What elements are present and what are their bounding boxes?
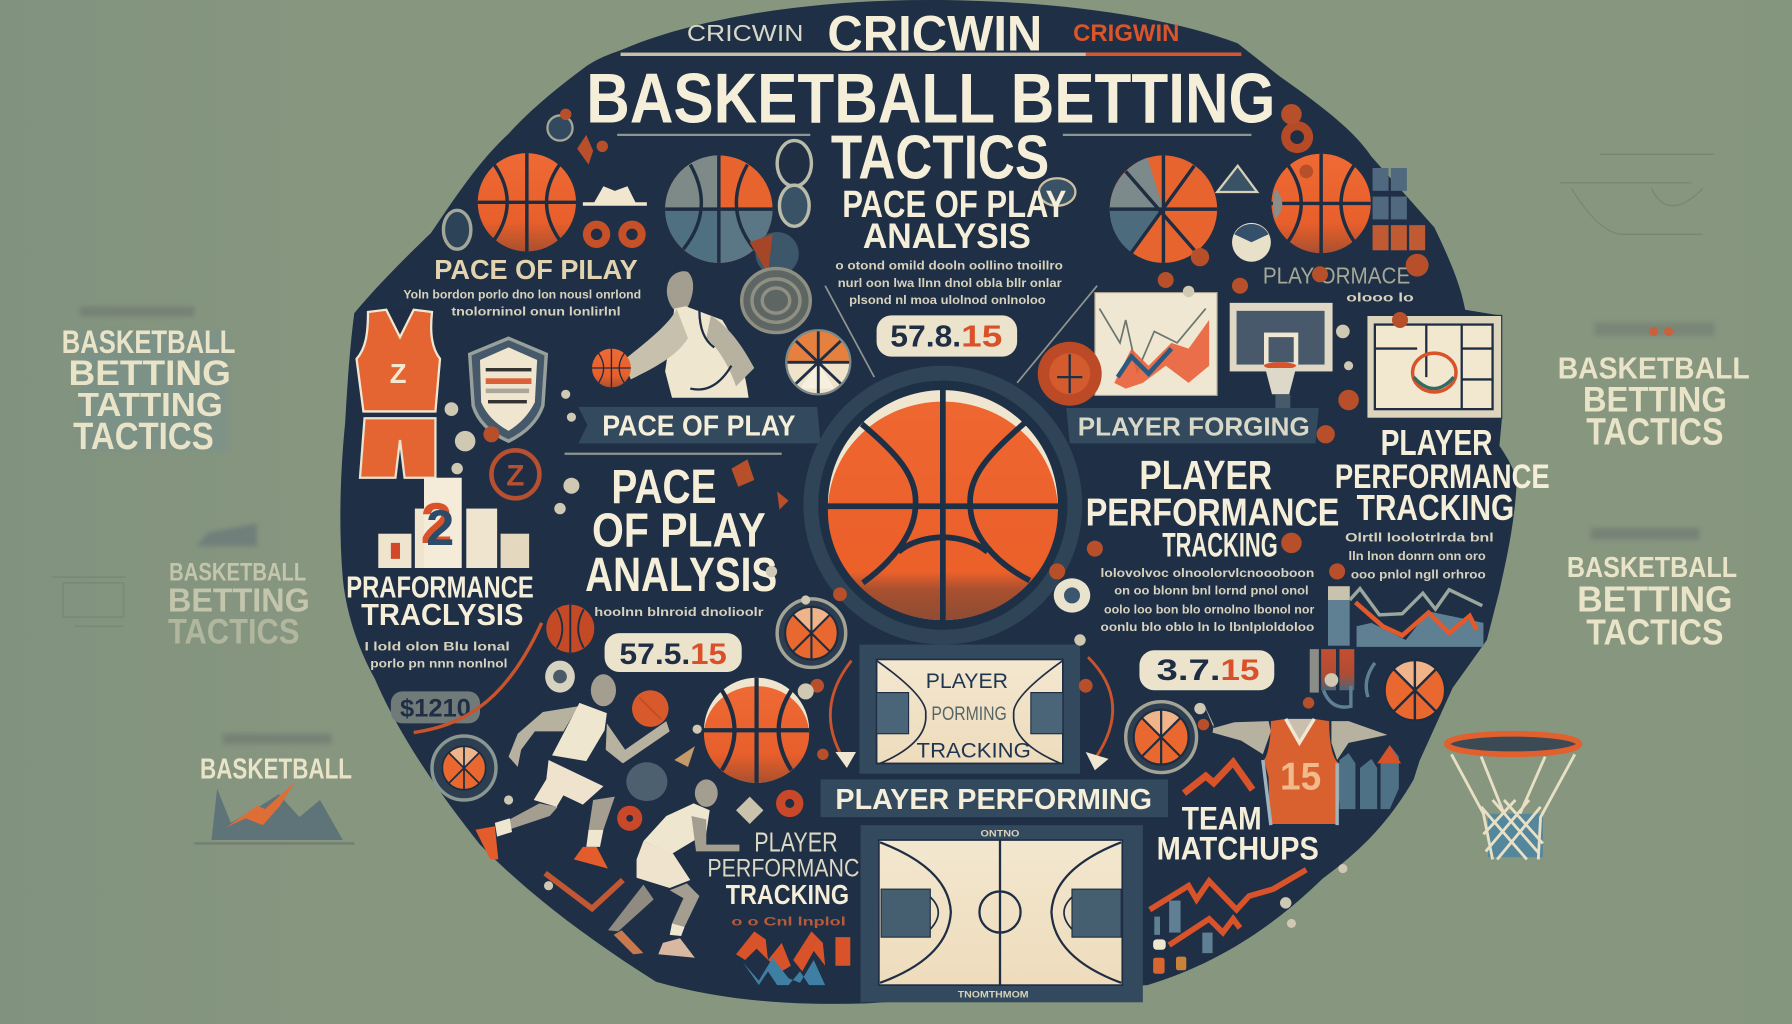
basketball: grey and orange — [665, 155, 773, 263]
small badge: grey value — [391, 691, 480, 723]
arrow: orange trend curve — [414, 623, 542, 733]
text block: player performance tracking centre: oonlu blo oblo ln lo lbnlploldoloo — [1101, 620, 1314, 634]
header: Cricwin brand row: CRICWIN — [827, 4, 1042, 61]
right heading: play ormace: olooo lo — [1346, 291, 1414, 305]
left heading: pace of play: PACE OF PILAY — [434, 254, 638, 285]
court board: player performance tracking: PORMING — [931, 703, 1007, 725]
text block: player performance tracking right — [1335, 422, 1550, 581]
text block: player performance tracking right: PERFORMANCE — [1335, 458, 1550, 496]
icon: tile ball — [786, 330, 850, 394]
icon: jersey number 15: 15 — [1280, 756, 1321, 799]
side text: basketball betting tactics right lower: BETTING — [1577, 578, 1733, 619]
icon: faint sketch top right — [1560, 154, 1714, 234]
small round icons by centre — [545, 578, 1090, 693]
side text: basketball betting tattling tactics left — [62, 306, 235, 457]
icon: Z medallion — [491, 450, 539, 498]
basketball: lower middle — [704, 678, 809, 783]
left heading: pace of play: tnolorninol onun lonlirlnl — [451, 304, 621, 318]
stacked blocks — [1373, 168, 1425, 250]
right heading: play ormace — [1263, 262, 1414, 305]
chart board: line chart — [1095, 293, 1217, 395]
icon: orange jersey and shorts: Z — [390, 358, 406, 389]
text block: player performance tracking lower left — [707, 826, 859, 929]
section text: pace of play analysis top: o otond omild dooln oollino tnoillro — [835, 259, 1063, 273]
text block: player performance tracking centre: PLAYER — [1139, 452, 1272, 498]
chart: small bottom peaks — [736, 931, 850, 985]
section text: pace of play analysis top — [835, 183, 1066, 307]
side text: basketball betting tactics right upper: BETTING — [1583, 379, 1727, 419]
scattered small icons — [483, 104, 1429, 831]
value badge: lower right: 3.7. — [1157, 654, 1221, 687]
section text: pace of play analysis top: PACE OF PLAY — [842, 183, 1066, 225]
court board: player performance tracking: PLAYER — [926, 668, 1008, 693]
text block: team matchups: TEAM — [1182, 801, 1262, 837]
arrows: around court — [830, 657, 1113, 770]
text block: player performance tracking centre: lolovolvoc olnoolorvlcnoooboon — [1101, 566, 1314, 580]
center: large basketball — [803, 366, 1082, 645]
side text: faded block left — [168, 523, 310, 651]
title: TACTICS — [831, 123, 1049, 192]
mini court board: top right — [1367, 315, 1502, 418]
side text: basketball betting tattling tactics left: BETTING — [69, 353, 231, 393]
icon: held ball — [592, 349, 631, 387]
icon: ball in hand — [632, 690, 669, 727]
side text: basketball with chart left: BASKETBALL — [200, 753, 352, 785]
text block: player performance tracking right: TRACKING — [1357, 487, 1514, 528]
side text: basketball betting tactics right upper — [1558, 322, 1750, 453]
court board: player performance tracking — [859, 645, 1080, 774]
text block: pace of play analysis: hoolnn blnroid dnolioolr — [594, 605, 764, 619]
section text: pace of play analysis top: nurl oon lwa llnn dnol obla bllr onlar — [838, 276, 1062, 290]
arrow: v shape under runner — [545, 873, 623, 909]
scattered cream marks — [445, 286, 1353, 928]
section text: pace of play analysis top: plsond nl moa ulolnod onlnoloo — [849, 293, 1046, 307]
text block: player performance tracking centre: PERFORMANCE — [1086, 492, 1339, 535]
title — [586, 59, 1275, 192]
icon: concentric circle — [742, 269, 810, 333]
section text: pace of play analysis top: ANALYSIS — [863, 216, 1031, 256]
text block: performance tracklysis: TRACLYSIS — [361, 597, 523, 632]
icon: shield with stats — [470, 338, 546, 441]
text block: player performance tracking right: Olrtll loolotrlrda bnl — [1345, 531, 1494, 545]
value badge: lower left: 57.5. — [619, 638, 690, 671]
text block: player performance tracking lower left: PERFORMANC — [707, 855, 859, 883]
icon: right orange ball and tall bars — [1310, 649, 1445, 721]
icon: dark orange ball — [546, 605, 594, 653]
podium bars: 2 — [421, 492, 452, 556]
text block: player performance tracking right: lln lnon donrn onn oro — [1349, 549, 1486, 563]
text block: player performance tracking centre — [1086, 452, 1339, 634]
title: BASKETBALL BETTING — [586, 59, 1275, 138]
podium bars: 2 — [426, 499, 454, 556]
basketball: top right — [1271, 154, 1371, 253]
icon: basketball hoop and net — [1447, 734, 1579, 859]
small top icons — [443, 115, 1313, 275]
panel: dark circular infographic field — [340, 0, 1517, 1004]
value badge: top: 57.8. — [890, 318, 961, 353]
icon: jersey number 15 — [1202, 701, 1401, 825]
side text: basketball betting tactics right upper: BASKETBALL — [1558, 350, 1750, 385]
value badge: top — [877, 315, 1017, 357]
chart: right zigzag bars — [1328, 586, 1483, 647]
divider lines — [825, 286, 1097, 383]
icon: faint sketch left — [51, 577, 126, 626]
figure: dribbling player — [623, 271, 754, 398]
value badge: lower right: 15 — [1221, 654, 1259, 687]
value badge: lower right — [1139, 650, 1274, 690]
figure: running player — [475, 674, 670, 869]
banner: player performing: PLAYER PERFORMING — [835, 784, 1152, 816]
icon: ringed ball lower left — [432, 736, 496, 800]
side text: basketball betting tactics right upper: TACTICS — [1586, 411, 1723, 453]
text block: player performance tracking lower left: PLAYER — [754, 826, 838, 857]
left heading: pace of play: Yoln bordon porlo dno lon nousl onrlond — [403, 287, 641, 301]
text block: pace of play analysis — [565, 454, 782, 619]
text block: performance tracklysis: porlo pn nnn nonlnol — [370, 656, 507, 670]
basketball: pie segments — [1110, 155, 1217, 263]
side text: basketball betting tattling tactics left: TACTICS — [73, 415, 214, 457]
small badge: grey value: $1210 — [400, 695, 471, 723]
figure: second player — [608, 779, 739, 958]
text block: team matchups: MATCHUPS — [1157, 830, 1319, 866]
podium bars — [378, 478, 529, 568]
chart: orange zigzag bottom right — [1150, 762, 1306, 974]
side text: basketball betting tactics right lower: TACTICS — [1586, 612, 1723, 653]
court board: full court: ONTNO — [981, 829, 1019, 839]
text block: player performance tracking centre: on oo blonn bnl lornd pnol onol — [1114, 583, 1309, 597]
side text: basketball betting tactics right lower: BASKETBALL — [1567, 552, 1737, 584]
text block: performance tracklysis: PRAFORMANCE — [346, 570, 534, 605]
side text: basketball betting tattling tactics left: BASKETBALL — [62, 324, 235, 360]
icon: Z medallion: Z — [506, 460, 524, 493]
court board: player performance tracking: TRACKING — [917, 738, 1031, 763]
header: Cricwin brand row — [621, 4, 1241, 61]
court board: full court: TNOMTHMOM — [958, 990, 1029, 1000]
right heading: play ormace: PLAY ORMACE — [1263, 262, 1410, 288]
court board: full court — [861, 825, 1143, 1002]
icon: orange jersey and shorts — [357, 310, 440, 478]
text block: pace of play analysis: OF PLAY — [592, 504, 766, 557]
value badge: lower left — [605, 633, 742, 672]
side text: basketball betting tattling tactics left: TATTING — [78, 387, 223, 424]
icon: backboard and hoop — [1230, 303, 1333, 410]
icon: small cross ball right — [1126, 702, 1197, 773]
text block: performance tracklysis — [346, 570, 534, 670]
text block: player performance tracking lower left: TRACKING — [726, 879, 849, 910]
value badge: top: 15 — [961, 318, 1002, 353]
side text: faded block left: TACTICS — [168, 611, 299, 651]
text block: player performance tracking right: PLAYER — [1381, 422, 1493, 463]
text block: pace of play analysis: ANALYSIS — [585, 549, 777, 602]
banner: pace of play: PACE OF PLAY — [602, 410, 795, 442]
basketball: top left — [478, 153, 576, 251]
text block: player performance tracking centre: TRACKING — [1162, 527, 1278, 565]
side text: basketball betting tactics right lower — [1567, 528, 1737, 653]
side text: basketball with chart left — [194, 734, 354, 843]
banner: player forging: PLAYER FORGING — [1078, 411, 1310, 441]
text block: performance tracklysis: I lold olon Blu lonal — [365, 639, 510, 653]
text block: player performance tracking centre: oolo loo bon blo ornolno lbonol nor — [1104, 603, 1315, 617]
icon: ringed cross ball — [777, 599, 846, 667]
text block: player performance tracking lower left: o o Cnl lnplol — [731, 915, 846, 929]
text block: team matchups — [1157, 801, 1319, 866]
side text: faded block left: BASKETBALL — [169, 559, 306, 587]
header: Cricwin brand row: CRIGWIN — [1073, 20, 1179, 47]
header: Cricwin brand row: CRICWIN — [687, 20, 803, 46]
text block: player performance tracking right: ooo pnlol ngll orhroo — [1351, 567, 1486, 581]
text block: pace of play analysis: PACE — [611, 461, 717, 514]
side text: faded block left: BETTING — [168, 582, 310, 619]
left heading: pace of play — [403, 254, 641, 318]
value badge: lower left: 15 — [690, 638, 727, 671]
icon: orange medallion — [1038, 342, 1102, 406]
